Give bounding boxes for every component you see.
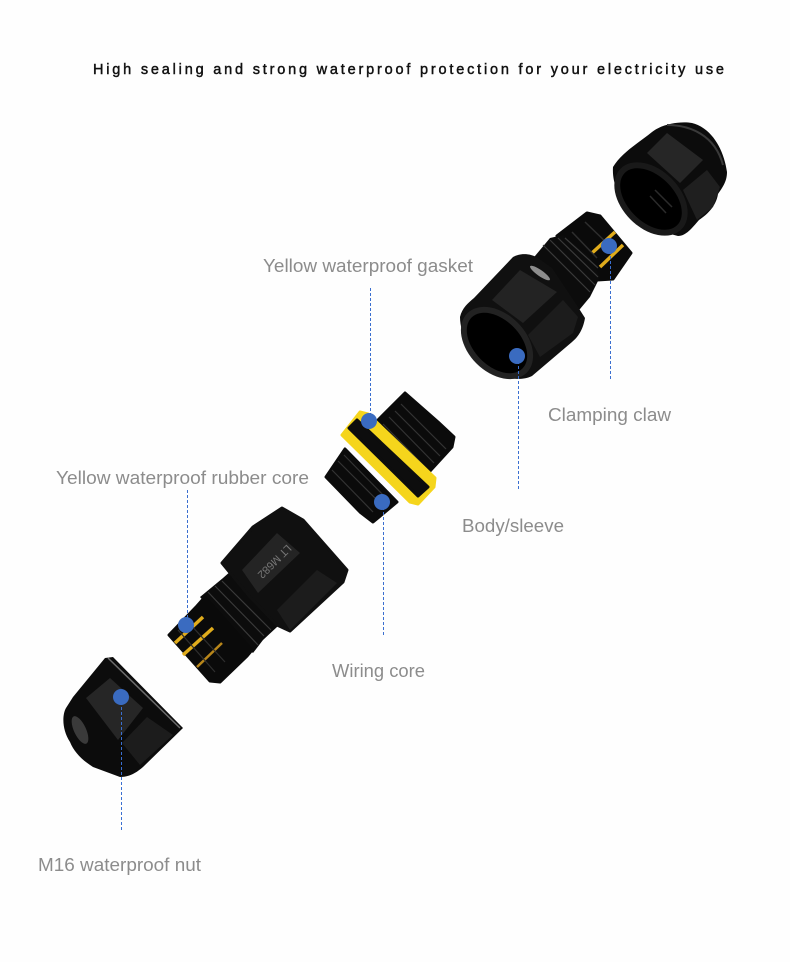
title: High sealing and strong waterproof protection for your electricity use bbox=[93, 62, 724, 78]
callout: clamping claw: Clamping claw bbox=[548, 405, 672, 425]
callout: yellow waterproof gasket bbox=[263, 256, 473, 429]
part: clamping claw fingers (top) bbox=[557, 213, 631, 280]
callout: M16 waterproof nut: M16 waterproof nut bbox=[38, 855, 201, 875]
part: top cap nut bbox=[600, 122, 727, 250]
callout: clamping claw bbox=[548, 238, 672, 425]
callout: yellow waterproof gasket: Yellow waterproof gasket bbox=[263, 256, 473, 276]
part: threaded neck (top) bbox=[530, 235, 600, 315]
callout: wiring core bbox=[332, 494, 425, 681]
part: bottom cap nut bbox=[63, 657, 183, 777]
callout: M16 waterproof nut bbox=[38, 689, 201, 875]
callout: body/sleeve bbox=[462, 348, 564, 536]
part: body sleeve (bottom): LT M682 bbox=[255, 542, 293, 580]
callout: yellow waterproof rubber core: Yellow waterproof rubber core bbox=[56, 468, 309, 488]
part: body sleeve (bottom) bbox=[222, 508, 347, 631]
part: rubber core fingers (bottom) bbox=[169, 597, 252, 682]
callout: wiring core: Wiring core bbox=[332, 661, 425, 681]
callout: yellow waterproof rubber core bbox=[56, 468, 309, 633]
part: body sleeve (top) bbox=[447, 254, 585, 393]
callout: body/sleeve: Body/sleeve bbox=[462, 516, 564, 536]
part: wiring core bbox=[326, 393, 454, 522]
part: threaded neck (bottom) bbox=[200, 570, 285, 653]
